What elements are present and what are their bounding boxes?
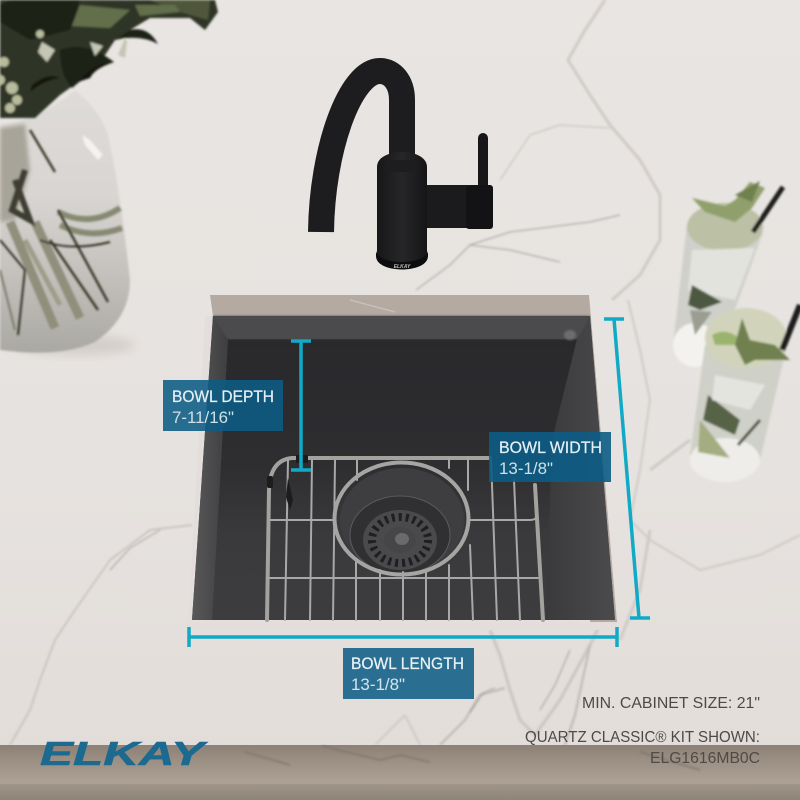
- label: bowl width: 13-1/8": [499, 460, 553, 478]
- faucet handle: [418, 133, 493, 229]
- vase neck shading: [0, 124, 30, 222]
- note: kit shown: ELG1616MB0C: [650, 750, 760, 767]
- label: bowl depth: [163, 380, 283, 431]
- submerged stems: [0, 130, 122, 335]
- foliage: [0, 0, 218, 118]
- front glass: [690, 305, 800, 482]
- cocktail glasses: [673, 181, 800, 482]
- note: kit shown: [525, 729, 760, 767]
- spout: [321, 71, 402, 232]
- label: bowl depth: 7-11/16": [172, 409, 234, 427]
- label: bowl width: [489, 432, 611, 482]
- glass vase: [0, 90, 130, 353]
- dimension line: bowl width: [604, 319, 650, 618]
- strainer drain: [340, 468, 464, 574]
- label: bowl width: BOWL WIDTH: [499, 439, 602, 457]
- sink: [188, 295, 617, 630]
- label: bowl depth: BOWL DEPTH: [172, 388, 274, 406]
- faucet body: [376, 152, 428, 270]
- note: minimum cabinet size: MIN. CABINET SIZE: 21": [582, 695, 760, 712]
- dimension line: bowl depth: [291, 341, 311, 470]
- label: bowl length: BOWL LENGTH: [351, 655, 464, 673]
- faucet: [321, 71, 493, 270]
- vase highlight: [82, 135, 103, 160]
- bottom counter edge: [0, 745, 800, 800]
- ELKAY logo: ELKAY: [40, 735, 208, 772]
- label: bowl length: [343, 648, 474, 699]
- faucet body: ELKAY: [394, 264, 411, 270]
- wire rack grid: [267, 458, 543, 620]
- vase with plant: [0, 0, 218, 355]
- rack clips: [267, 455, 308, 510]
- back glass: [673, 181, 783, 367]
- sink bowl: [192, 316, 615, 620]
- dimension line: bowl length: [189, 627, 617, 647]
- note: kit shown: QUARTZ CLASSIC® KIT SHOWN:: [525, 729, 760, 746]
- sink rim: [188, 295, 617, 630]
- vase shadow: [15, 335, 135, 355]
- label: bowl length: 13-1/8": [351, 676, 405, 694]
